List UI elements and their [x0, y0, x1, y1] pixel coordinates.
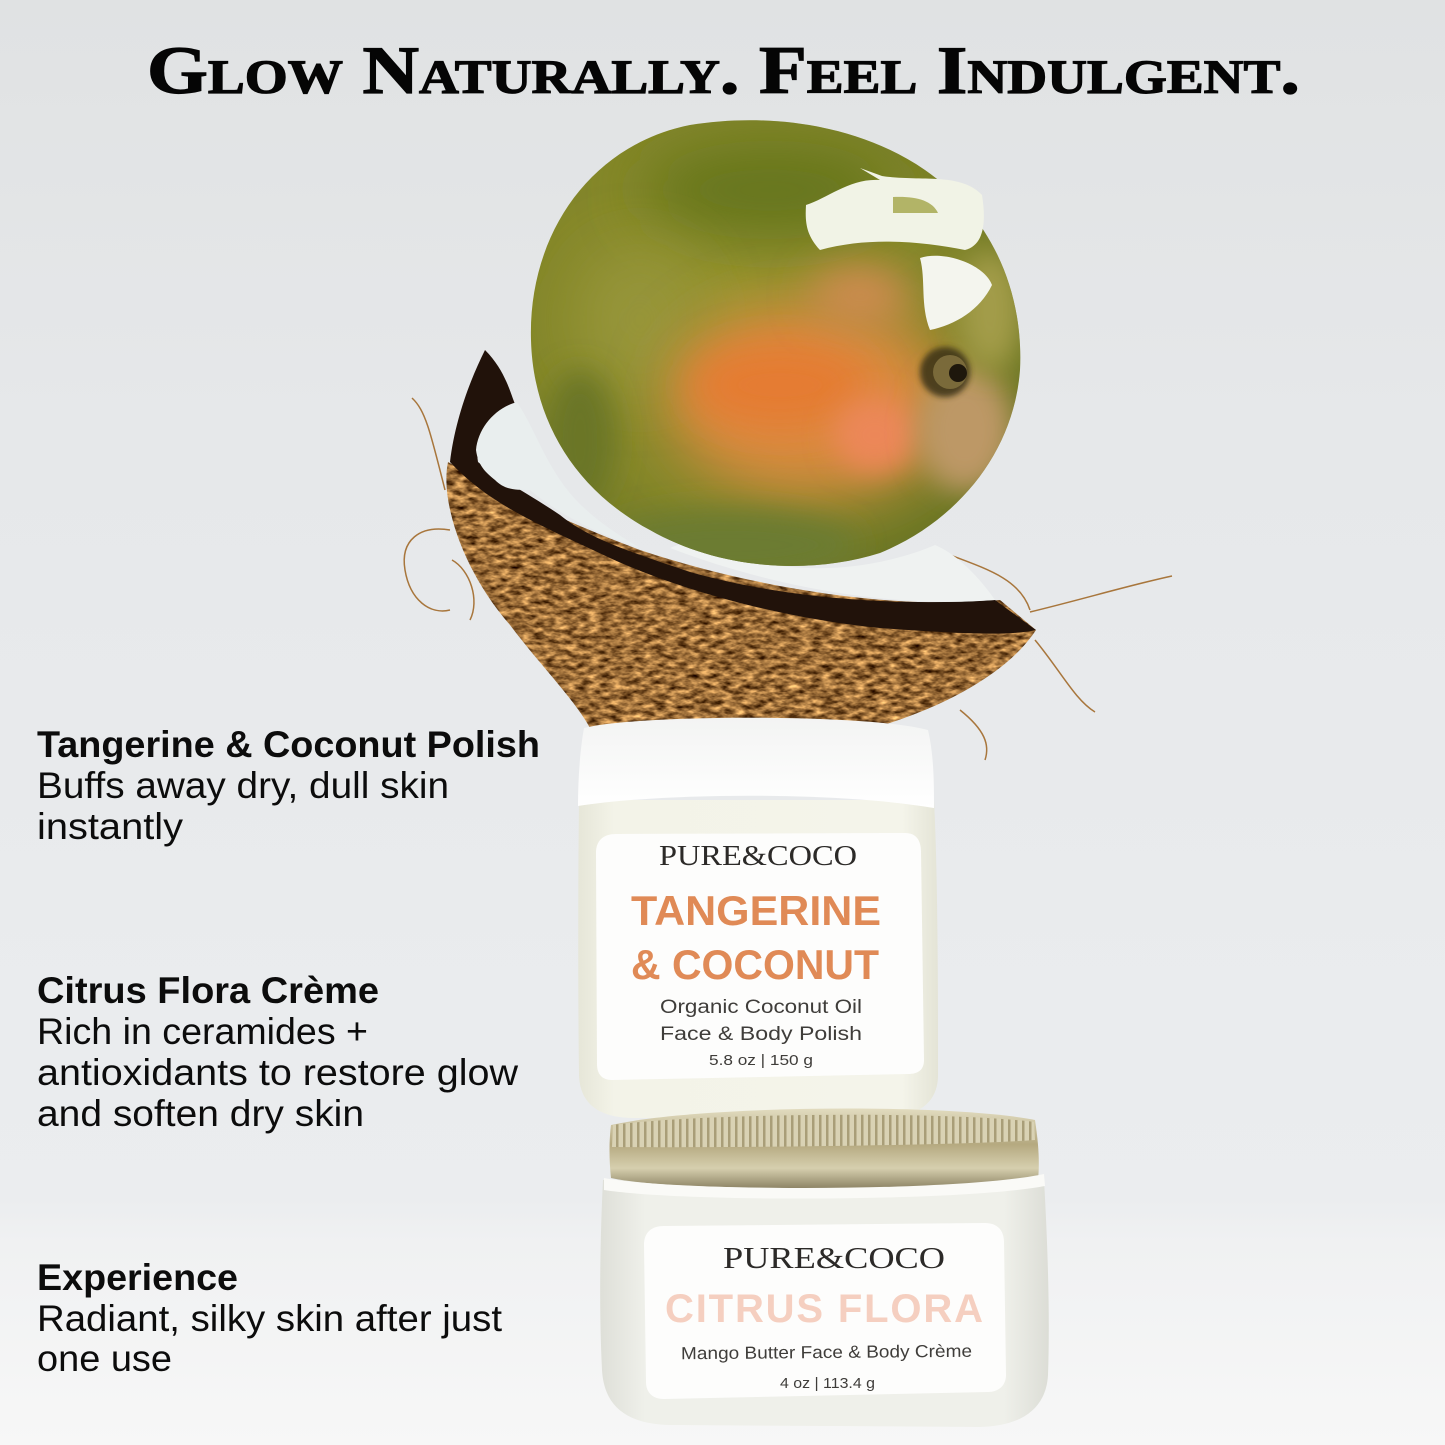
- product photo: tangerine and coconut jar: & COCONUT: [631, 941, 879, 988]
- product photo: coconut half: [404, 350, 1172, 760]
- text block: Experience: [37, 1257, 503, 1379]
- text block: Citrus Flora Crème: Citrus Flora Crème: [37, 970, 379, 1011]
- product description: Organic Coconut Oil: [660, 997, 862, 1018]
- brand: PURE&COCO: [723, 1240, 945, 1275]
- product photo: citrus flora jar: [600, 1109, 1049, 1427]
- text block: Citrus Flora Crème: Rich in ceramides +: [37, 1011, 368, 1052]
- gold lid: [610, 1109, 1039, 1188]
- dark inner shell rim: [450, 350, 1036, 634]
- text block: Citrus Flora Crème: and soften dry skin: [37, 1093, 364, 1134]
- mango skin: [531, 120, 1020, 566]
- text block: Citrus Flora Crème: antioxidants to restore glow: [37, 1052, 518, 1093]
- product name: TANGERINE: [631, 887, 881, 934]
- text block: Experience: Radiant, silky skin after just: [37, 1298, 503, 1339]
- title: Glow Naturally. Feel Indulgent.: [147, 32, 1300, 108]
- text block: Experience: one use: [37, 1338, 172, 1379]
- mango stem: [920, 347, 970, 397]
- jar label: [644, 1223, 1006, 1399]
- product description: Mango Butter Face & Body Crème: [681, 1341, 972, 1363]
- white lid: [578, 718, 934, 808]
- product name: CITRUS FLORA: [665, 1287, 983, 1331]
- product photo: tangerine and coconut jar: Face & Body Polish: [660, 1024, 862, 1045]
- text block: Experience: Experience: [37, 1257, 238, 1298]
- shell body: [446, 462, 1036, 728]
- jar label: [596, 833, 924, 1080]
- jar body: [578, 800, 938, 1118]
- product photo: tangerine and coconut jar: [578, 718, 938, 1118]
- net weight: 5.8 oz | 150 g: [709, 1052, 813, 1069]
- cream smear: [806, 168, 984, 250]
- text block: Tangerine & Coconut Polish: Buffs away dry, dull skin: [37, 765, 449, 806]
- net weight: 4 oz | 113.4 g: [780, 1375, 875, 1392]
- mango colour blush: [640, 140, 900, 240]
- text block: Tangerine & Coconut Polish: [37, 724, 540, 847]
- coconut flesh: [476, 402, 640, 548]
- text block: Citrus Flora Crème: [37, 970, 518, 1134]
- brand: PURE&COCO: [659, 840, 857, 872]
- product photo: mango: [531, 120, 1022, 580]
- coconut fibres: [404, 398, 1172, 760]
- text block: Tangerine & Coconut Polish: Tangerine & Coconut Polish: [37, 724, 540, 765]
- jar body: [600, 1180, 1049, 1427]
- text block: Tangerine & Coconut Polish: instantly: [37, 806, 184, 847]
